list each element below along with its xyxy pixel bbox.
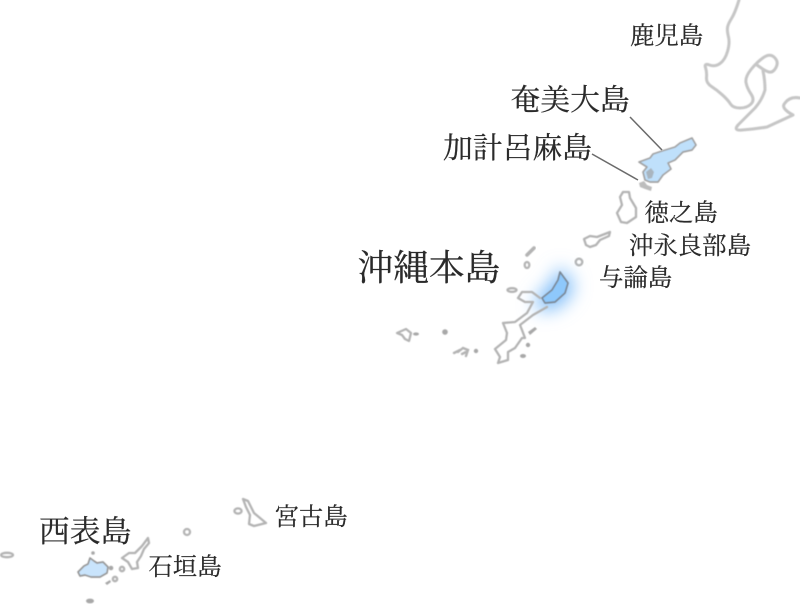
island: Kagoshima coast [705,0,800,130]
label: 加計呂麻島: 加計呂麻島 [443,132,592,165]
label: 沖永良部島: 沖永良部島 [629,233,751,260]
label: 石垣島: 石垣島 [148,554,222,581]
island: Tokunoshima [617,192,636,223]
islands: Kume and Kerama [397,329,478,356]
label: 徳之島: 徳之島 [644,200,718,227]
islands: Iheya and Izena [525,248,534,268]
label: 沖縄本島: 沖縄本島 [358,248,500,288]
island: Okinoerabu [584,232,610,247]
label: 宮古島: 宮古島 [274,504,348,531]
island: Iriomote [78,551,113,577]
island: Miyako [234,499,266,526]
label: 与論島: 与論島 [599,265,672,292]
label: 西表島: 西表島 [39,515,131,549]
highlight glow: Okinawa north [535,266,574,311]
label: 鹿児島: 鹿児島 [630,23,703,50]
islands: around Okinawa [508,288,537,358]
label: 奄美大島: 奄美大島 [510,84,630,117]
island: Amami Oshima [639,138,696,182]
island: Okinawa main island [495,272,568,363]
island: Tarama and Yonaguni [1,529,190,603]
island: Kakeroma [639,181,652,191]
leader line: Kakeroma [592,154,638,180]
leader line: Amami Oshima [630,117,662,150]
island: Yoron [576,259,582,265]
island: Ishigaki [105,538,149,585]
